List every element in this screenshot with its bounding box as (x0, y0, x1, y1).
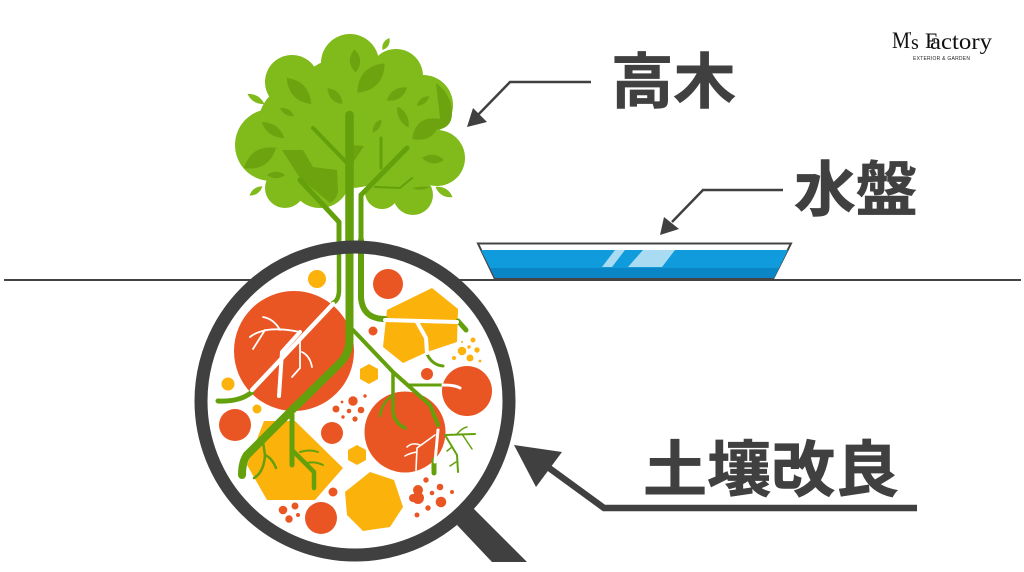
logo: M (892, 28, 910, 53)
soil cutaway inside magnifier (205, 240, 505, 551)
canopy shadows (282, 83, 452, 203)
water highlights (602, 250, 675, 267)
trunk and branches (300, 115, 412, 245)
logo (892, 28, 993, 62)
label: tall tree: 高木 (611, 49, 736, 116)
logo: s (911, 32, 919, 54)
logo: EXTERIOR & GARDEN (913, 56, 970, 62)
yellow soil particles (222, 270, 481, 531)
magnifier handle (457, 508, 527, 562)
magnifier ring (201, 247, 509, 555)
water basin (478, 244, 791, 279)
green roots (218, 240, 475, 488)
orange soil particles (219, 269, 492, 534)
magnifying glass (201, 247, 527, 562)
label: soil improvement: 土壤改良 (643, 436, 899, 505)
logo: actory (930, 29, 993, 54)
tree (235, 34, 465, 245)
arrow: soil improvement (514, 445, 917, 508)
logo: ' (909, 30, 912, 45)
white roots over particles (250, 304, 460, 470)
label: water basin: 水盤 (794, 157, 918, 224)
arrow: tree (467, 82, 591, 127)
arrow: water basin (660, 190, 783, 235)
tree canopy (235, 34, 465, 215)
logo: F (925, 28, 937, 53)
tree leaves (240, 37, 454, 200)
